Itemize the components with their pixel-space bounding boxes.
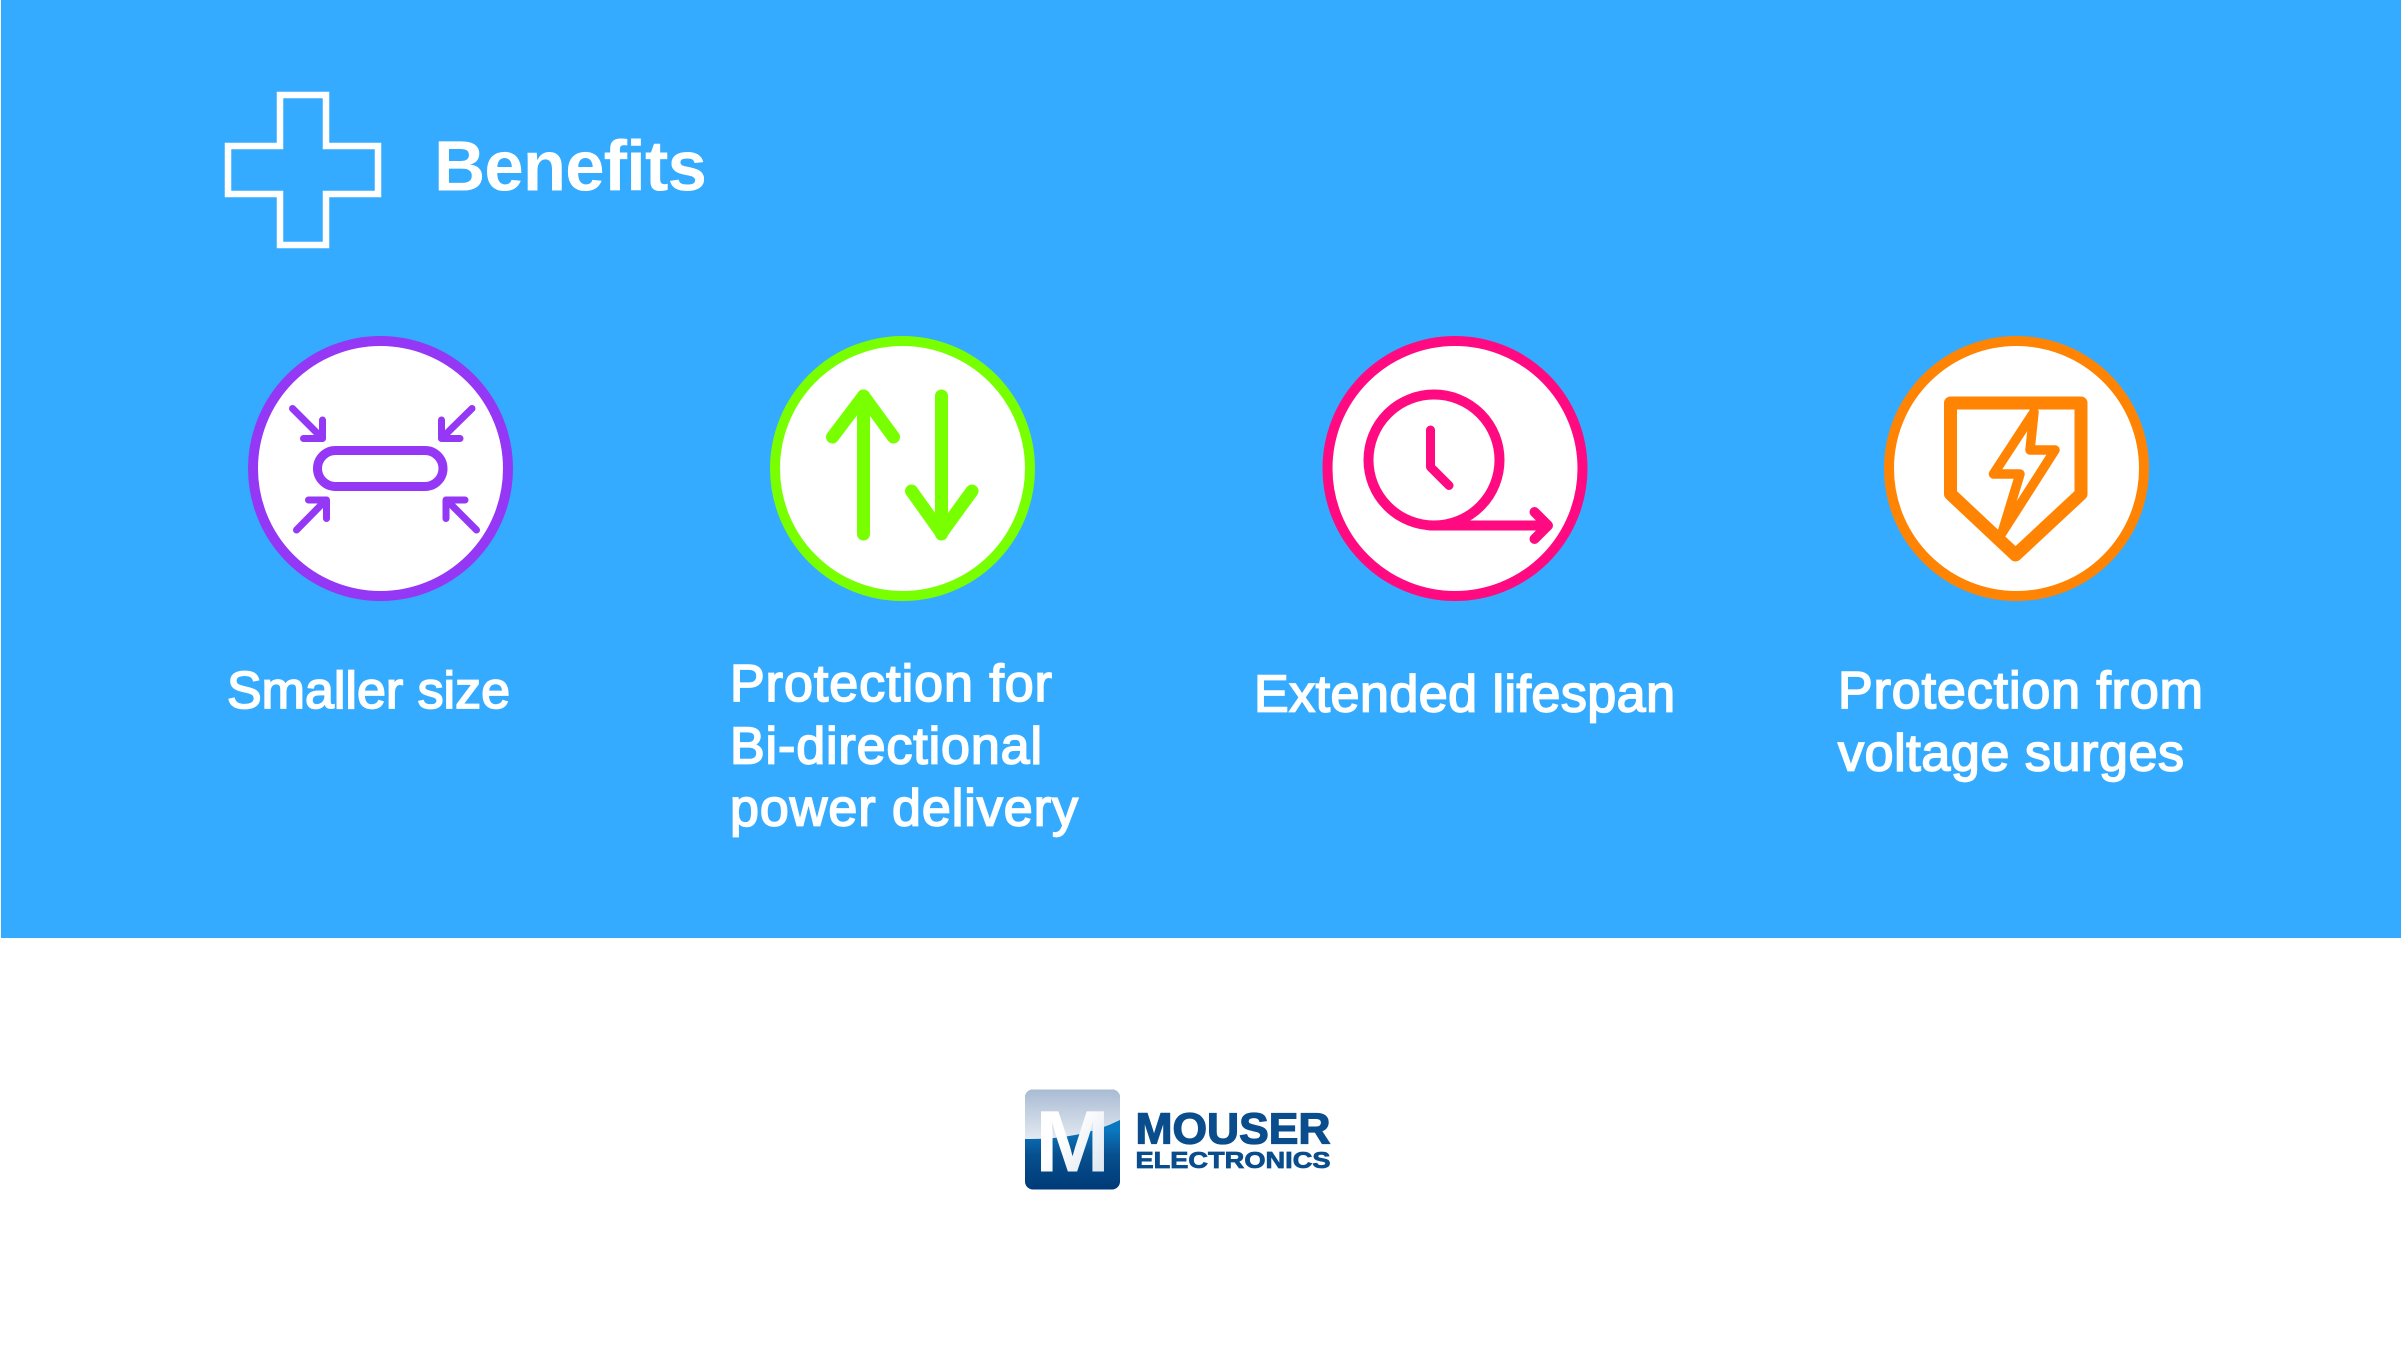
benefit label: bi-directional protection: Bi-directional — [730, 718, 1042, 776]
icon: plus cross outline — [228, 95, 378, 245]
benefit label: bi-directional protection: Protection for — [730, 655, 1052, 713]
heading: Benefits: Benefits — [434, 128, 707, 206]
benefit label: extended lifespan: Extended lifespan — [1254, 666, 1675, 724]
benefit icon: smaller size — [253, 341, 508, 596]
panel: benefits background — [1, 0, 2401, 938]
benefit label: voltage surge protection — [1838, 662, 2203, 782]
benefit label: voltage surge protection: Protection from — [1838, 662, 2203, 720]
logo: Mouser Electronics — [1025, 1090, 1330, 1190]
benefit label: bi-directional protection — [730, 655, 1078, 838]
benefit icon: bi-directional arrows — [775, 341, 1030, 596]
logo wordmark: MOUSER — [1136, 1106, 1330, 1154]
benefit label: bi-directional protection: power delivery — [730, 780, 1078, 838]
logo mark: M — [1035, 1094, 1110, 1190]
benefit icon: shield with lightning bolt — [1889, 341, 2144, 596]
benefit icon: clock with arrow — [1328, 341, 1582, 596]
logo wordmark — [1136, 1106, 1330, 1173]
benefit label: voltage surge protection: voltage surges — [1838, 724, 2184, 782]
logo wordmark: ELECTRONICS — [1136, 1147, 1330, 1173]
benefit label: smaller size: Smaller size — [227, 662, 510, 720]
